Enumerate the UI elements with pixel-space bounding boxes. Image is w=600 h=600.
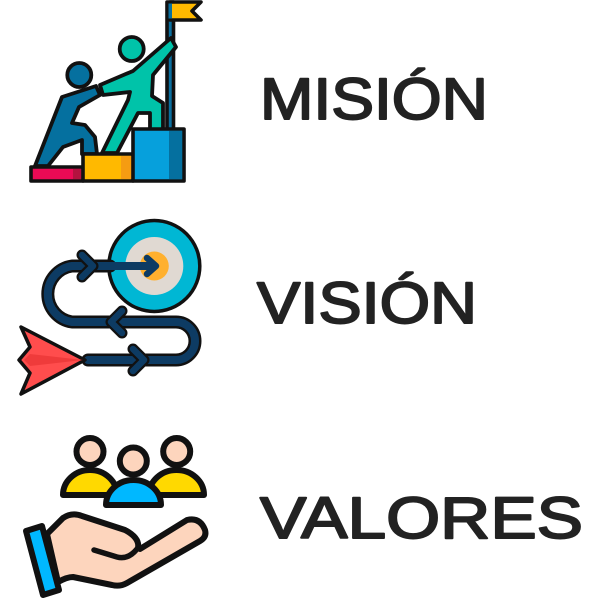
heading: Visión: VISIÓN [257, 271, 477, 336]
podium steps [31, 129, 184, 181]
centre person [106, 448, 161, 505]
target [109, 220, 200, 312]
heading: Valores: VALORES [260, 486, 583, 551]
hand [26, 514, 205, 595]
arrow chevrons [82, 255, 144, 371]
winding path [48, 266, 195, 360]
left person [63, 438, 117, 495]
paper plane arrowhead [19, 327, 85, 394]
blue climber [35, 63, 100, 166]
right person [149, 438, 204, 495]
green climber [100, 37, 176, 153]
flag [167, 2, 201, 132]
icon: hand holding a group of people [26, 438, 205, 595]
icon: winding arrow path toward a target [19, 220, 200, 394]
icon: climbers helping each other reach a flag [31, 2, 201, 181]
heading: Misión: MISIÓN [260, 67, 488, 132]
